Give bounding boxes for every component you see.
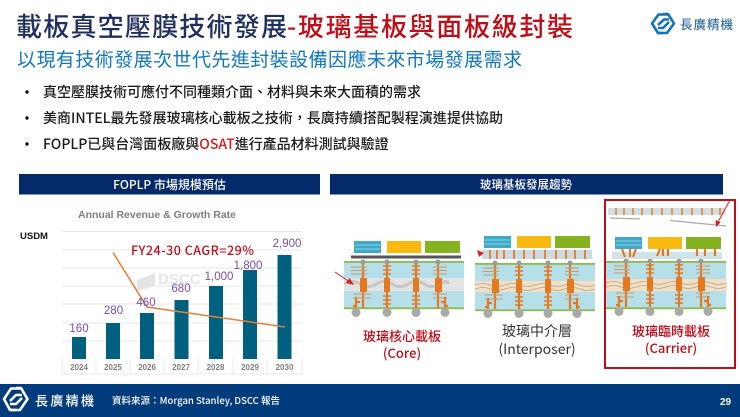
watermark <box>137 271 201 291</box>
panel: glass substrate trend <box>330 174 735 368</box>
logo: top right: 長廣精機 <box>680 14 733 33</box>
diagram: core <box>335 241 464 362</box>
label: core: (Core) <box>383 343 421 362</box>
footer company name: 長廣精機 <box>35 390 94 410</box>
arrow <box>716 200 730 227</box>
detached interposer <box>608 208 726 226</box>
year axis <box>62 359 302 374</box>
icon: company mark <box>652 14 674 33</box>
CAGR callout: FY24-30 CAGR=29% <box>131 240 254 259</box>
label: interposer: 玻璃中介層 <box>502 321 572 341</box>
heading: FOPLP <box>19 174 320 194</box>
label: core: 玻璃核心載板 <box>363 326 441 345</box>
highlight frame <box>605 200 735 368</box>
chart title: Annual Revenue & Growth Rate <box>78 209 236 221</box>
year axis: 2025 <box>104 363 122 372</box>
icon: footer logo <box>4 388 28 410</box>
year axis: 2030 <box>276 363 294 372</box>
value labels: 460 <box>136 297 156 309</box>
diagram: carrier <box>605 200 735 368</box>
title: 載板真空壓膜技術發展 <box>16 7 287 44</box>
panel: FOPLP market size <box>19 174 320 374</box>
value labels: 280 <box>104 305 123 317</box>
heading: FOPLP: FOPLP 市場規模預估 <box>113 176 226 193</box>
value labels: 680 <box>171 283 191 295</box>
heading: trend: 玻璃基板發展趨勢 <box>480 176 572 192</box>
year axis: 2028 <box>207 363 225 372</box>
year axis: 2024 <box>70 363 88 372</box>
label: carrier <box>632 321 710 357</box>
title: -玻璃基板與面板級封裝 <box>287 7 573 44</box>
label: carrier: 玻璃臨時載板 <box>632 321 710 340</box>
logo: top right <box>652 14 733 33</box>
bar chart <box>20 209 302 374</box>
bars <box>72 255 292 359</box>
diagram: interposer <box>475 236 595 359</box>
subtitle: 以現有技術發展次世代先進封裝設備因應未來市場發展需求 <box>17 45 522 72</box>
label: core <box>363 326 441 362</box>
year axis: 2026 <box>138 363 156 372</box>
arrow <box>335 272 354 285</box>
page number: 29 <box>720 397 732 408</box>
growth line <box>113 252 285 327</box>
heading: trend <box>330 174 723 194</box>
title <box>16 7 573 44</box>
value labels: 160 <box>69 323 89 335</box>
value labels: 2,900 <box>273 238 301 250</box>
arrow <box>477 250 484 257</box>
value labels: 1,800 <box>234 260 262 272</box>
label: interposer <box>498 321 576 359</box>
year axis: 2029 <box>241 363 259 372</box>
bullet 1: 真空壓膜技術可應付不同種類介面、材料與未來大面積的需求 <box>43 82 421 102</box>
bullet 3: FOPLP已與台灣面板廠與OSAT進行產品材料測試與驗證 <box>43 134 389 154</box>
year axis: 2027 <box>172 363 190 372</box>
bullet list <box>25 82 503 154</box>
source note: 資料來源：Morgan Stanley, DSCC 報告 <box>112 393 280 407</box>
label: carrier: (Carrier) <box>645 338 697 357</box>
value labels: 1,000 <box>205 271 233 283</box>
footer bar <box>0 384 740 417</box>
label: interposer: (Interposer) <box>498 339 576 359</box>
bullet 2: 美商INTEL最先發展玻璃核心載板之技術，長廣持續搭配製程演進提供協助 <box>43 108 503 128</box>
watermark: DSCC <box>158 271 201 288</box>
value labels <box>69 238 301 335</box>
axis unit: USDM <box>20 231 48 242</box>
